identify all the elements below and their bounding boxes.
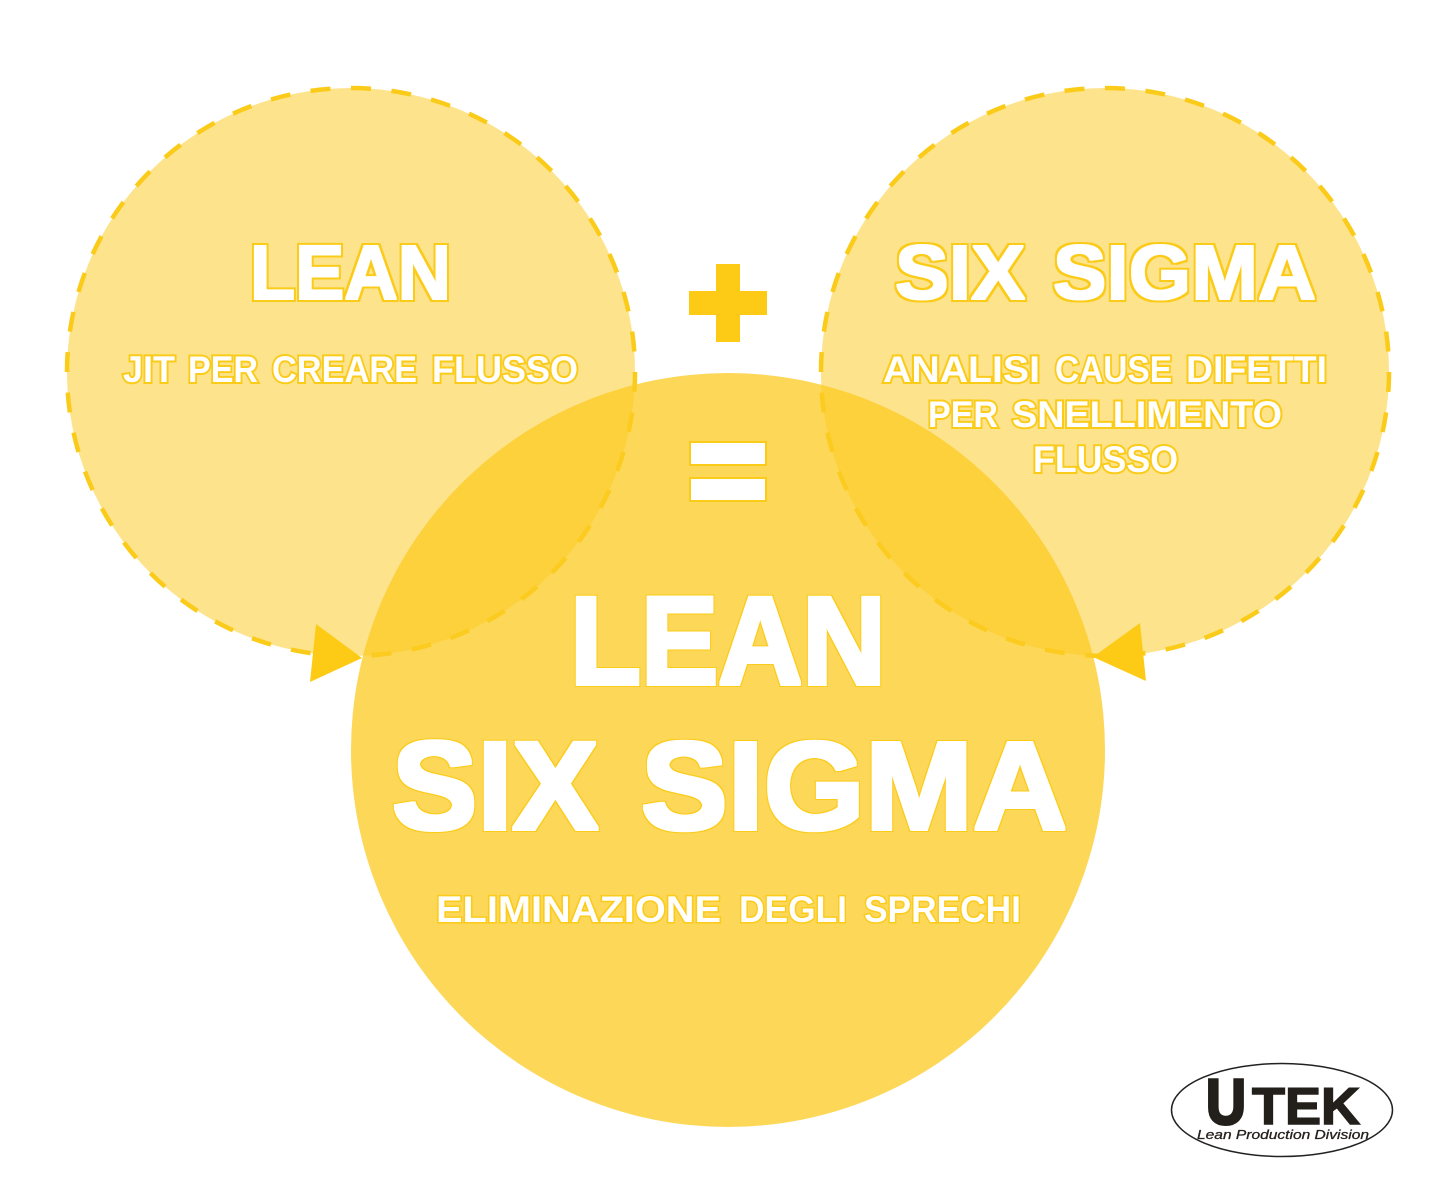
heading: lean: LEAN xyxy=(250,230,451,316)
arrow: lean into result xyxy=(310,624,362,682)
text: lean description xyxy=(123,349,578,390)
text: six sigma description: SNELLIMENTO xyxy=(1012,394,1282,435)
logo: utek: TEK xyxy=(1252,1078,1360,1136)
logo: utek: U xyxy=(1206,1066,1246,1138)
heading: lean six sigma: SIGMA xyxy=(641,717,1067,856)
text: six sigma description: PER xyxy=(928,394,998,435)
text: lean description: JIT xyxy=(123,349,175,390)
text: result description: ELIMINAZIONE xyxy=(436,889,721,930)
text: six sigma description: DIFETTI xyxy=(1186,349,1327,390)
text: result description xyxy=(436,889,1021,930)
text: six sigma description xyxy=(883,349,1327,480)
circle: lean six sigma result xyxy=(351,373,1105,1127)
heading: lean six sigma: LEAN xyxy=(570,572,886,711)
arrow: six sigma into result xyxy=(1093,623,1146,681)
text: six sigma description: ANALISI xyxy=(883,349,1040,390)
logo: utek xyxy=(1172,1064,1392,1156)
circle: lean xyxy=(67,88,635,656)
heading: six sigma: SIGMA xyxy=(1053,230,1316,316)
heading: lean six sigma xyxy=(392,572,1067,856)
heading: six sigma xyxy=(895,230,1316,316)
text: lean description: CREARE xyxy=(272,349,417,390)
logo: utek: Lean Production Division xyxy=(1197,1127,1369,1142)
text: lean description: PER xyxy=(188,349,258,390)
text: six sigma description: FLUSSO xyxy=(1033,439,1178,480)
heading: six sigma: SIX xyxy=(895,230,1025,316)
text: lean description: FLUSSO xyxy=(432,349,578,390)
circle: six sigma xyxy=(821,88,1389,656)
text: six sigma description: CAUSE xyxy=(1055,349,1172,390)
heading: lean six sigma: SIX xyxy=(392,717,598,856)
text: result description: DEGLI xyxy=(739,889,847,930)
icon: plus sign xyxy=(689,264,767,342)
icon: equals sign xyxy=(690,442,766,501)
text: result description: SPRECHI xyxy=(864,889,1021,930)
